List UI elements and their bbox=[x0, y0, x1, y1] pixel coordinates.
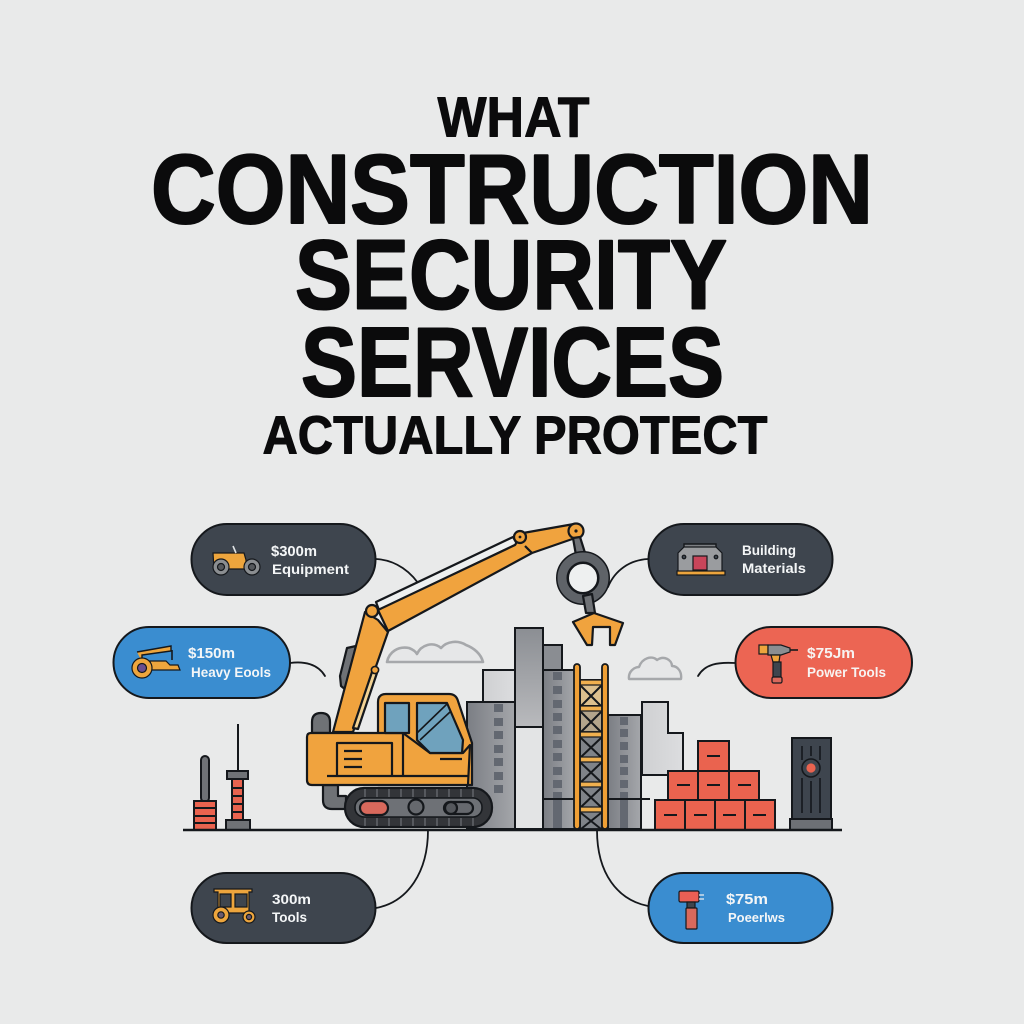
building: light right block bbox=[642, 702, 683, 775]
excavator bbox=[307, 524, 623, 827]
label: building materials bbox=[742, 542, 806, 576]
ground line bbox=[183, 829, 842, 831]
label: $150m heavy tools bbox=[188, 645, 271, 680]
label: $75m poeerlws: $75m bbox=[726, 891, 768, 908]
pill: equipment bbox=[192, 524, 376, 595]
bricks stack bbox=[655, 741, 775, 830]
claw bbox=[573, 613, 623, 645]
pill: powerlws bbox=[648, 873, 832, 943]
building: small top bbox=[543, 645, 562, 671]
label: building materials: Building bbox=[742, 542, 796, 558]
cabin window right bbox=[417, 703, 463, 753]
pill: power tools bbox=[736, 627, 912, 698]
building: far right tower bbox=[608, 715, 641, 829]
hook connector bbox=[573, 537, 586, 561]
label: $300m equipment: $300m bbox=[271, 544, 317, 560]
upper rod bbox=[376, 537, 517, 610]
label: $75m poeerlws bbox=[726, 891, 785, 925]
buildings bbox=[467, 628, 683, 829]
title: ACTUALLY PROTECT bbox=[262, 406, 768, 466]
cabin bbox=[378, 694, 472, 785]
cloud right bbox=[629, 658, 681, 679]
joints bbox=[366, 605, 378, 617]
engine panel bbox=[327, 733, 468, 776]
icon: hammer drill bbox=[679, 891, 704, 929]
label: 300m tools: Tools bbox=[272, 910, 307, 925]
building: centre dark bbox=[515, 628, 543, 727]
left tool: post with red base bbox=[194, 756, 216, 830]
title: SERVICES bbox=[301, 307, 724, 417]
scaffold tower bbox=[574, 664, 608, 829]
label: $300m equipment: Equipment bbox=[272, 562, 350, 577]
building: right tower bbox=[543, 670, 575, 829]
track bbox=[345, 788, 492, 827]
building: windows bbox=[494, 672, 628, 828]
label: $150m heavy tools: $150m bbox=[188, 645, 235, 662]
left tool: antenna column bbox=[226, 724, 250, 830]
label: 300m tools: 300m bbox=[272, 891, 311, 907]
body bbox=[307, 733, 470, 785]
ring grapple bbox=[562, 557, 604, 599]
crane boom bbox=[378, 524, 581, 631]
title: SECURITY bbox=[295, 220, 727, 330]
pill: tools bbox=[192, 873, 376, 943]
title bbox=[151, 86, 873, 466]
cloud left bbox=[387, 642, 483, 662]
label: $75m poeerlws: Poeerlws bbox=[728, 910, 785, 925]
counterweight bbox=[340, 646, 356, 690]
icon: road roller bbox=[132, 646, 180, 678]
label: $75Jm power tools: Power Tools bbox=[807, 665, 886, 680]
pill: heavy tools bbox=[114, 627, 290, 698]
crane lower arm bbox=[333, 612, 388, 732]
icon: materials crate bbox=[677, 544, 725, 575]
track wheel red bbox=[360, 801, 388, 815]
track wheel right bbox=[444, 802, 473, 814]
title: CONSTRUCTION bbox=[151, 134, 873, 244]
building: left tower bbox=[467, 702, 516, 829]
label: building materials: Materials bbox=[742, 560, 806, 576]
pill: building materials bbox=[648, 524, 832, 595]
label: $75Jm power tools: $75Jm bbox=[807, 645, 855, 662]
engine cap bbox=[312, 713, 330, 733]
label: 300m tools bbox=[272, 891, 311, 925]
label: $150m heavy tools: Heavy Eools bbox=[191, 665, 271, 680]
security cabinet bbox=[790, 738, 832, 830]
icon: utility cart bbox=[213, 889, 255, 923]
icon: drill bbox=[759, 645, 798, 683]
label: $300m equipment bbox=[271, 544, 350, 577]
building: centre light bbox=[515, 727, 543, 829]
connector lines bbox=[290, 559, 735, 908]
title: WHAT bbox=[438, 86, 590, 150]
building: top light bbox=[483, 670, 516, 703]
icon: tractor bbox=[213, 546, 260, 575]
label: $75Jm power tools bbox=[807, 645, 886, 680]
exhaust pipe bbox=[323, 785, 346, 809]
cabin window left bbox=[385, 703, 409, 733]
piston bbox=[353, 672, 377, 729]
track wheel middle bbox=[408, 800, 424, 814]
